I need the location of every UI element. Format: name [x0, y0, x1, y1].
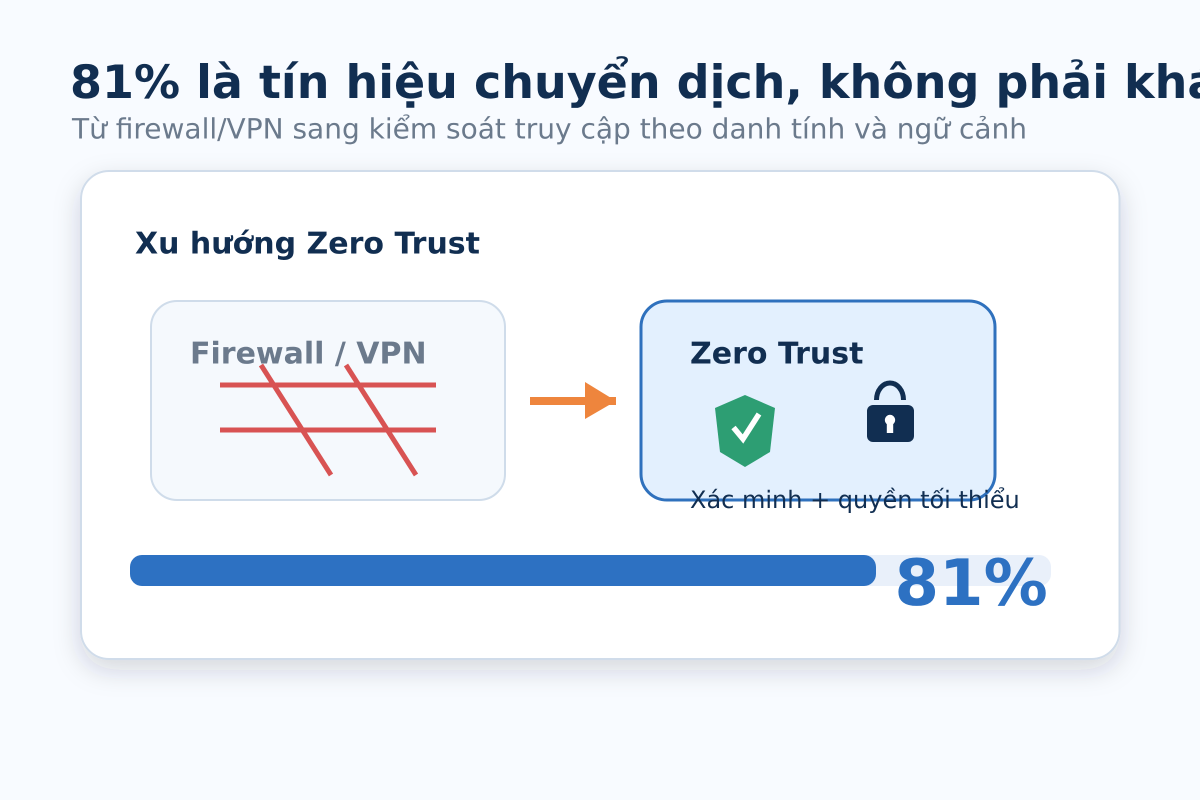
firewall label: Firewall / VPN [190, 336, 427, 372]
icon: broken wall lines [220, 365, 436, 475]
panel: zero trust [641, 301, 1020, 514]
progress bar [130, 555, 1051, 586]
card heading: Xu hướng Zero Trust [135, 226, 480, 262]
arrow [530, 382, 616, 419]
stat: 81%: 81% [894, 547, 1048, 621]
panel: firewall / VPN [151, 301, 505, 500]
subtitle: Từ firewall/VPN sang kiểm soát truy cập theo danh tính và ngữ cảnh [71, 112, 1027, 146]
panel: main card [81, 171, 1120, 659]
icon: lock [867, 383, 914, 442]
zero trust label: Zero Trust [690, 336, 863, 372]
zero trust caption: Xác minh + quyền tối thiểu [690, 486, 1020, 514]
icon: shield check [715, 395, 775, 467]
